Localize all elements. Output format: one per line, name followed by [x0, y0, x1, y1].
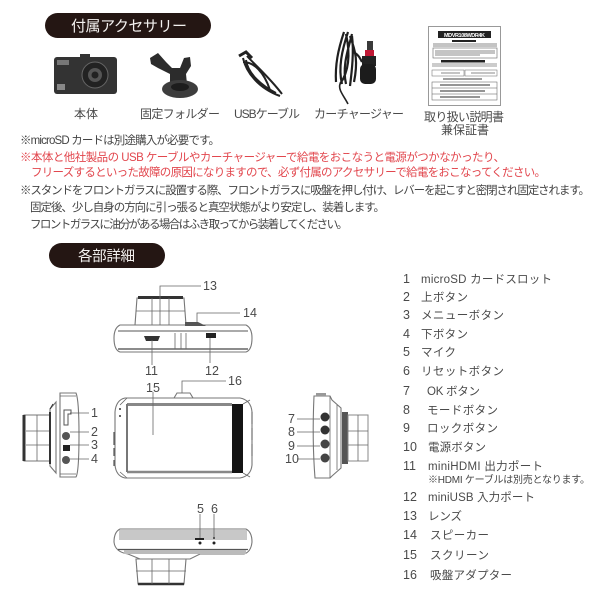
callouts 1 to 4: 3: [91, 438, 98, 452]
parts list: 7: [403, 384, 410, 398]
red warning text: ※本体と他社製品の USB ケーブルやカーチャージャーで給電をおこなうと電源がつかなかったり、: [20, 150, 505, 164]
callouts 7 to 10: 10: [285, 452, 299, 466]
accessory captions: USBケーブル: [234, 106, 300, 121]
diagram: camera left side view: [24, 393, 79, 477]
parts list: 10: [403, 440, 417, 454]
note: microSD: ※microSD カードは別途購入が必要です。: [20, 133, 220, 147]
parts list: ※HDMI ケーブルは別売となります。: [428, 473, 590, 486]
parts list: miniUSB 入力ポート: [428, 491, 535, 504]
accessory captions: 兼保証書: [441, 123, 489, 137]
parts list: miniHDMI 出力ポート: [428, 460, 543, 473]
parts list: 16: [403, 568, 417, 582]
diagram: camera top view: [114, 298, 252, 352]
callout 12: 12: [205, 364, 219, 378]
callouts 7 to 10: 7: [288, 412, 295, 426]
red warning text: フリーズするといった故障の原因になりますので、必ず付属のアクセサリーで給電をおこなってください。: [31, 165, 546, 179]
icon: camera body photo: [54, 54, 117, 94]
heading pill: accessories: 付属アクセサリー: [71, 18, 187, 35]
icon: USB cable: [239, 52, 282, 96]
parts list: 14: [403, 528, 417, 542]
callout 16: 16: [228, 374, 242, 388]
accessory captions: カーチャージャー: [314, 107, 404, 121]
callout 14: [197, 306, 257, 322]
parts list: ロックボタン: [427, 422, 498, 435]
callout 12: [205, 338, 219, 378]
callouts 7 to 10: 8: [288, 425, 295, 439]
icon: fixed holder: [150, 53, 198, 98]
parts list: 電源ボタン: [428, 440, 486, 454]
parts list: 15: [403, 548, 417, 562]
parts list: 12: [403, 490, 417, 504]
parts list: 9: [403, 421, 410, 435]
callout 16: [182, 374, 242, 393]
parts list: 6: [403, 364, 410, 378]
callout 15: [146, 381, 160, 435]
callout 13: 13: [203, 279, 217, 293]
parts list: 5: [403, 345, 410, 359]
callouts 1 to 4: [70, 406, 98, 466]
parts list: 3: [403, 308, 410, 322]
callouts 7 to 10: [285, 412, 320, 466]
parts list: スクリーン: [430, 549, 489, 562]
callouts 7 to 10: 9: [288, 439, 295, 453]
diagram: camera bottom view: [114, 529, 252, 584]
callout 11: 11: [145, 364, 158, 378]
parts list: 2: [403, 290, 410, 304]
callout 14: 14: [243, 306, 257, 320]
parts list: 11: [403, 459, 416, 473]
callout 15: 15: [146, 381, 160, 395]
parts list: リセットボタン: [421, 365, 504, 378]
accessory captions: 取り扱い説明書: [424, 109, 504, 124]
parts list: モードボタン: [427, 404, 498, 417]
callout 13: [160, 279, 217, 325]
parts list: メニューボタン: [421, 309, 504, 322]
parts list: 8: [403, 403, 410, 417]
accessory captions: 本体: [74, 107, 98, 121]
callout 11: [145, 340, 158, 378]
installation notes: 固定後、少し自身の方向に引っ張ると真空状態がより安定し、装着します。: [30, 200, 385, 214]
callouts 5 and 6: 5: [197, 502, 204, 516]
parts list: 4: [403, 327, 410, 341]
accessory captions: 固定フォルダー: [140, 106, 220, 121]
callouts 1 to 4: 4: [91, 452, 98, 466]
parts list: 吸盤アダプター: [430, 568, 512, 582]
parts list: [403, 272, 590, 582]
parts list: スピーカー: [430, 529, 489, 542]
installation notes: フロントガラスに油分がある場合はふき取ってから装着してください。: [30, 217, 348, 231]
parts list: 下ボタン: [421, 328, 468, 341]
callouts 5 and 6: [197, 502, 218, 538]
parts list: 13: [403, 509, 417, 523]
installation notes: ※スタンドをフロントガラスに設置する際、フロントガラスに吸盤を押し付け、レバーを起こすと密閉され固定されます。: [20, 183, 590, 197]
parts list: レンズ: [428, 509, 462, 523]
icon: manual and warranty sheet: [428, 26, 500, 106]
parts list: 上ボタン: [421, 291, 468, 304]
installation notes: [20, 183, 590, 231]
icon: car charger: [336, 32, 376, 104]
parts list: OK ボタン: [427, 385, 480, 398]
parts list: マイク: [421, 346, 456, 359]
heading pill: accessories: [45, 13, 211, 38]
callouts 5 and 6: 6: [211, 502, 218, 516]
parts list: microSD カードスロット: [421, 273, 552, 286]
accessory captions: [74, 106, 504, 137]
callouts 1 to 4: 2: [91, 425, 98, 439]
diagram: camera right side view: [313, 393, 368, 478]
heading pill: parts detail: [49, 243, 165, 268]
red warning text: [20, 150, 546, 179]
diagram: camera front view: [114, 393, 252, 478]
icon: manual and warranty sheet: MDVR108WDR4K: [444, 33, 485, 39]
callouts 1 to 4: 1: [91, 406, 98, 420]
heading pill: parts detail: 各部詳細: [78, 248, 135, 265]
parts list: 1: [403, 272, 410, 286]
